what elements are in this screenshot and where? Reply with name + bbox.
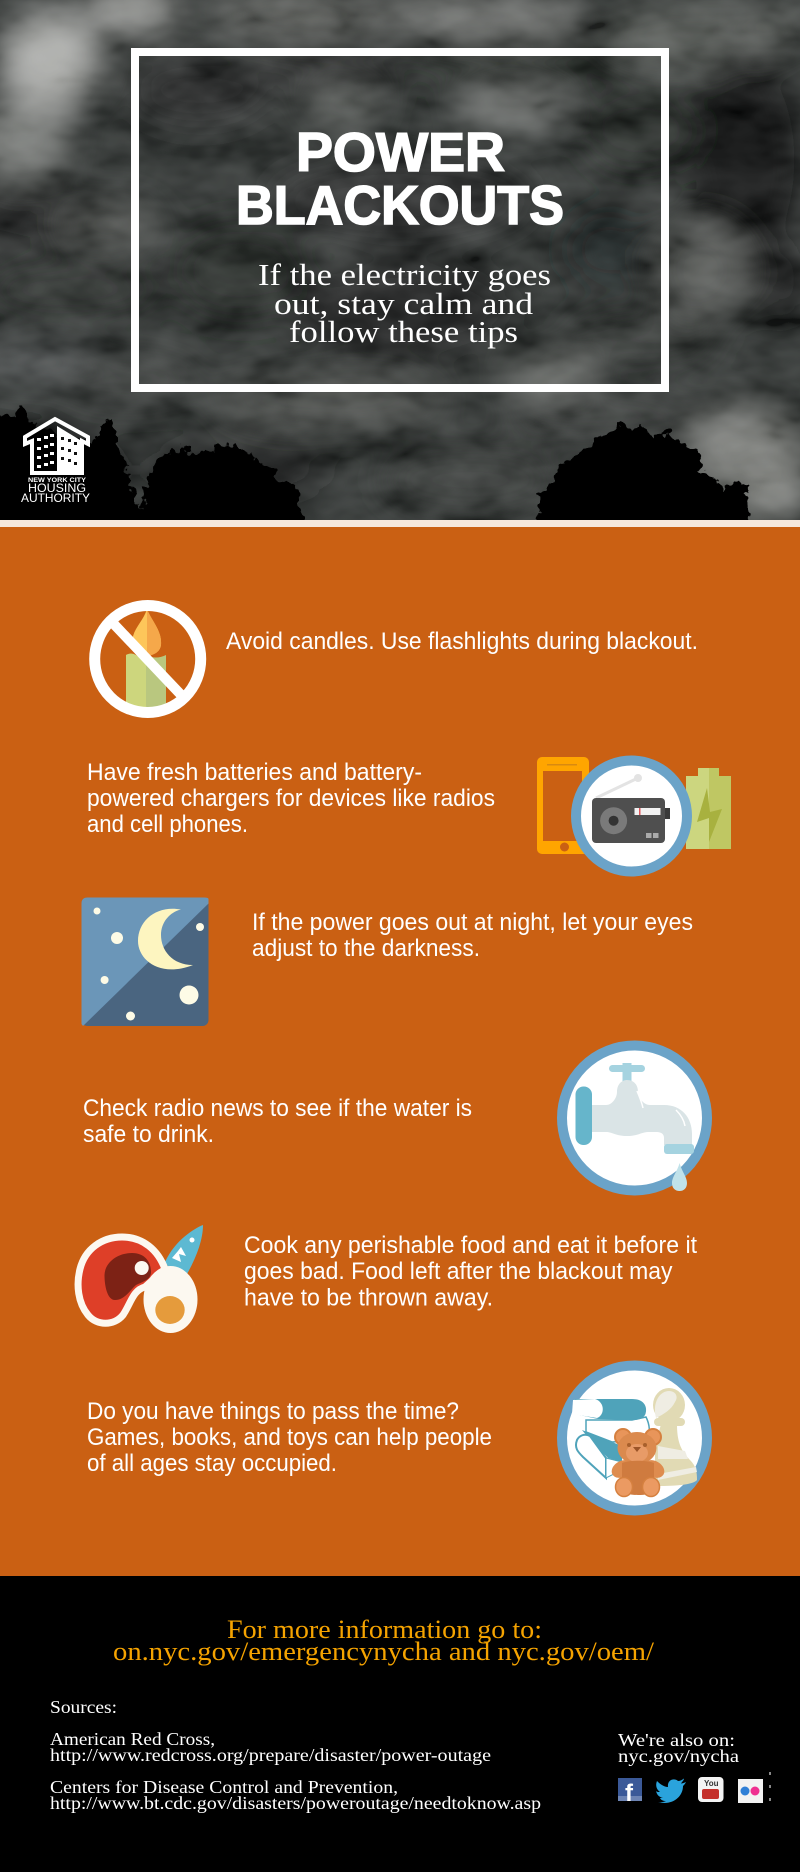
- social links: [618, 1730, 771, 1807]
- tip 6 text: Do you have things to pass the time?: [87, 1398, 459, 1425]
- title: [236, 121, 564, 236]
- icon: flickr: [738, 1779, 763, 1803]
- sources: Sources:: [50, 1697, 117, 1717]
- tip 2 text: and cell phones.: [87, 811, 248, 838]
- tip 3 text: [252, 909, 693, 962]
- logo: housing authority: AUTHORITY: [21, 491, 90, 505]
- icon: facebook: f: [625, 1780, 634, 1807]
- tip 4 icon: faucet: [562, 1046, 707, 1191]
- tip 3 icon: night sky: [82, 898, 208, 1026]
- tip 5 icon: food: [78, 1225, 203, 1333]
- icon: youtube: You: [704, 1779, 719, 1788]
- tip 6 text: Games, books, and toys can help people: [87, 1424, 492, 1451]
- subtitle: [258, 257, 551, 349]
- panel: tips: [0, 527, 800, 1576]
- panel: footer: [0, 1576, 800, 1872]
- divider band: [0, 520, 800, 527]
- tip 2 text: [87, 759, 495, 838]
- tip 5 text: [244, 1232, 697, 1312]
- tip 4 text: [83, 1095, 472, 1148]
- subtitle: follow these tips: [289, 314, 518, 349]
- tip 3 text: If the power goes out at night, let your eyes: [252, 909, 693, 936]
- title frame: [135, 52, 665, 388]
- social links: We're also on:: [618, 1730, 735, 1750]
- books: [572, 1399, 649, 1478]
- title: POWER: [296, 121, 505, 183]
- subtitle: out, stay calm and: [274, 286, 534, 321]
- teddy bear: [608, 1429, 668, 1496]
- tip 6 icon: books, bear, pawn: [562, 1366, 707, 1510]
- tip 2 text: Have fresh batteries and battery-: [87, 759, 422, 786]
- logo: housing authority: NEW YORK CITY: [28, 478, 86, 484]
- more information link: For more information go to:: [227, 1615, 542, 1644]
- sources: http://www.redcross.org/prepare/disaster/power-outage: [50, 1745, 491, 1765]
- logo: housing authority: HOUSING: [28, 481, 86, 495]
- tip 6 text: [87, 1398, 492, 1477]
- tip 5 text: Cook any perishable food and eat it before it: [244, 1232, 697, 1259]
- subtitle: If the electricity goes: [258, 257, 551, 292]
- hero: storm clouds: [0, 0, 800, 530]
- more information link: [113, 1615, 655, 1666]
- sources: Centers for Disease Control and Prevention,: [50, 1777, 398, 1797]
- sources: [50, 1697, 541, 1813]
- tip 6 text: of all ages stay occupied.: [87, 1450, 337, 1477]
- icon: youtube: [698, 1777, 724, 1802]
- tip 3 text: adjust to the darkness.: [252, 935, 480, 962]
- tip 5 text: have to be thrown away.: [244, 1284, 493, 1312]
- logo: housing authority: [21, 419, 90, 505]
- tip 4 text: safe to drink.: [83, 1121, 214, 1148]
- tip 4 text: Check radio news to see if the water is: [83, 1095, 472, 1122]
- tree silhouettes: [0, 405, 755, 530]
- icon: facebook: [618, 1778, 642, 1807]
- small dots: [769, 1772, 771, 1801]
- icon: twitter: [656, 1778, 686, 1803]
- tip 1 icon: no candles: [95, 606, 201, 712]
- title: BLACKOUTS: [236, 174, 564, 236]
- tip 2 text: powered chargers for devices like radios: [87, 785, 495, 812]
- sources: http://www.bt.cdc.gov/disasters/poweroutage/needtoknow.asp: [50, 1793, 541, 1813]
- sources: American Red Cross,: [50, 1729, 215, 1749]
- tip 5 text: goes bad. Food left after the blackout may: [244, 1258, 672, 1285]
- more information link: on.nyc.gov/emergencynycha and nyc.gov/oem/: [113, 1637, 655, 1666]
- tip 2 icon: phone, radio, battery: [537, 757, 731, 872]
- tip 1 text: Avoid candles. Use flashlights during blackout.: [226, 628, 698, 655]
- pawn: [653, 1388, 697, 1486]
- social links: nyc.gov/nycha: [618, 1746, 739, 1766]
